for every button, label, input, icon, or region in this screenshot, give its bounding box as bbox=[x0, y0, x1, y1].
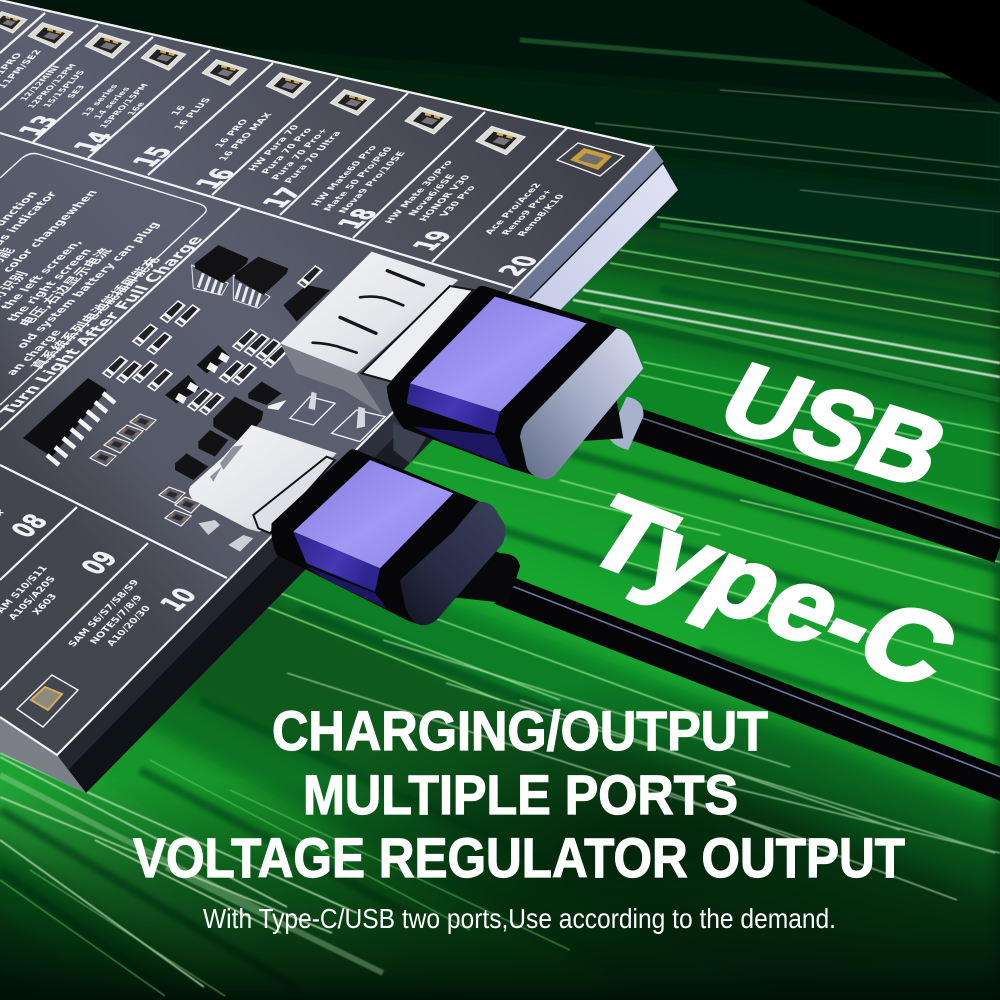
model labels row 13-20 bbox=[0, 46, 572, 242]
model labels row 13-20: Mate 50 Pro/P60 bbox=[321, 146, 396, 212]
model labels row 13-20: 13 series bbox=[79, 83, 120, 117]
USB shell slots bbox=[313, 271, 423, 353]
lower model labels 08-10: 08 bbox=[4, 509, 55, 542]
USB port shell bbox=[280, 252, 458, 373]
model labels row 13-20: 16 PLUS bbox=[172, 97, 214, 131]
model labels row 13-20: 15PRO/15PM bbox=[97, 83, 150, 129]
USB plug shadow on board bbox=[393, 423, 427, 463]
Type-C solder tabs bbox=[198, 520, 253, 552]
model labels row 13-20: 15/15PLUS bbox=[41, 69, 87, 108]
USB port solder tabs bbox=[308, 392, 365, 428]
left side SMD resistors bbox=[90, 355, 201, 526]
subtitle: With Type-C/USB two ports,Use according to the demand. bbox=[203, 903, 836, 934]
Type-C shell edge details bbox=[210, 445, 243, 482]
headline: MULTIPLE PORTS bbox=[303, 763, 738, 826]
model labels row 13-20: HONOR V30 bbox=[417, 174, 473, 222]
Type-C inner plug bbox=[253, 457, 335, 533]
function description panel text: color changewhen bbox=[0, 189, 101, 274]
model labels row 13-20: 12/12MINI bbox=[17, 65, 62, 102]
Type-C purple sleeve side bbox=[293, 532, 380, 592]
board side face bbox=[0, 147, 678, 793]
slot numbers 13-20: 20 bbox=[491, 253, 546, 279]
slot numbers 13-20: 13 bbox=[11, 113, 66, 139]
lower model labels 08-10: A10/20/30 bbox=[105, 604, 154, 648]
model labels row 13-20: Reno9 Pro+ bbox=[500, 188, 555, 236]
USB molded body bbox=[387, 286, 620, 478]
Type-C cable bbox=[500, 584, 1000, 789]
USB cable silver collar bbox=[608, 397, 643, 450]
slot numbers 13-20: 15 bbox=[125, 144, 180, 170]
lower model labels 08-10: SAM S6/S7/S8/S9 bbox=[66, 578, 142, 649]
model labels row 13-20: 16 bbox=[169, 104, 189, 117]
heading: turn light after full charge: Turn Light After Full Charge bbox=[0, 234, 207, 416]
model labels row 13-20: HW Mate60 Pro bbox=[309, 144, 380, 207]
USB port and plug bbox=[280, 252, 1000, 547]
Type-C tail face bbox=[400, 502, 505, 625]
USB strain relief bbox=[547, 383, 623, 443]
pad outlines bbox=[290, 397, 385, 442]
model labels row 13-20: HW Mate 30/Pro bbox=[383, 159, 456, 224]
lower model labels 08-10: 09 bbox=[74, 546, 125, 579]
model labels row 13-20: Pura 70 Ultra bbox=[282, 130, 344, 184]
Type-C label: Type-C bbox=[565, 476, 977, 709]
model labels row 13-20: Pura 70 Pro bbox=[259, 127, 315, 175]
slot numbers 13-20: 16 bbox=[188, 166, 243, 192]
headline: VOLTAGE REGULATOR OUTPUT bbox=[133, 826, 905, 889]
model labels row 13-20: 16e bbox=[125, 101, 147, 116]
function description panel text: old system battery can plug bbox=[13, 221, 163, 350]
model labels row 13-20: 16 PRO MAX bbox=[217, 111, 275, 162]
transistor leads bbox=[175, 352, 287, 410]
Type-C purple sleeve top bbox=[293, 460, 453, 568]
Type-C port shell bbox=[189, 425, 337, 532]
model labels row 13-20: 16 PRO bbox=[213, 118, 251, 149]
slot numbers 13-20: 18 bbox=[330, 206, 385, 232]
circuit components bbox=[132, 245, 330, 480]
model labels row 13-20: V30 Pro bbox=[438, 185, 479, 218]
USB inner plug metal bbox=[362, 286, 473, 382]
lower model labels 08-10: NOTE5/7/8/9 bbox=[88, 593, 145, 646]
model labels row 13-20: Ace Pro/Ace2 bbox=[483, 182, 544, 235]
function description panel text: 电压,右边显示电流 bbox=[15, 246, 116, 328]
Type-C port and plug bbox=[189, 425, 1000, 789]
USB label: USB bbox=[702, 344, 966, 507]
bottom chip icon bbox=[17, 675, 78, 727]
board printed grid bbox=[0, 0, 653, 755]
model labels row 13-20: Pura 70 Pro+ bbox=[269, 128, 331, 181]
board top surface bbox=[0, 0, 653, 755]
Type-C molded body bbox=[271, 449, 480, 625]
Type-C strain relief bbox=[447, 530, 520, 603]
function description panel text: 真系统系列电池能插即能充 bbox=[27, 255, 164, 371]
lower model labels 08-10: X603 bbox=[30, 592, 60, 617]
slot numbers 13-20: 19 bbox=[405, 228, 460, 254]
model labels row 13-20: HW Pura 70 bbox=[246, 124, 302, 172]
slot numbers 13-20: 14 bbox=[66, 129, 121, 155]
USB purple sleeve side bbox=[407, 383, 500, 433]
model labels row 13-20: SE3 bbox=[65, 84, 87, 99]
slot numbers 13-20 bbox=[11, 113, 546, 279]
row of battery connectors bbox=[0, 12, 624, 176]
black transistors bbox=[165, 285, 330, 480]
model labels row 13-20: 12PRO/12PM bbox=[25, 63, 78, 109]
model labels row 13-20: Nova9 Pro/10SE bbox=[337, 151, 408, 214]
function description panel text: the right screen bbox=[3, 247, 95, 323]
model labels row 13-20: Reno8/K10 bbox=[515, 193, 568, 237]
headline bbox=[133, 699, 905, 889]
USB purple sleeve top bbox=[410, 297, 587, 412]
black corner top right bbox=[803, 0, 1000, 103]
lower model labels 08-10 bbox=[0, 506, 204, 661]
function description panel text: an charge bbox=[3, 328, 65, 377]
model labels row 13-20: Nova6/6SE bbox=[406, 173, 458, 217]
slot numbers 13-20: 17 bbox=[255, 185, 310, 211]
model labels row 13-20: 14 series bbox=[91, 86, 132, 120]
USB plug tail face bbox=[520, 328, 643, 479]
lower model labels 08-10: A10S/A20S bbox=[7, 575, 58, 622]
USB port lower body bbox=[280, 343, 383, 415]
function description panel text bbox=[0, 176, 206, 381]
SOP chips with legs bbox=[192, 245, 288, 308]
SMD resistors bbox=[132, 265, 323, 416]
headline: CHARGING/OUTPUT bbox=[272, 699, 768, 762]
lower model labels 08-10: 10 bbox=[153, 583, 204, 616]
USB cable bbox=[620, 412, 1000, 547]
DIP chip with pins bbox=[23, 378, 115, 465]
